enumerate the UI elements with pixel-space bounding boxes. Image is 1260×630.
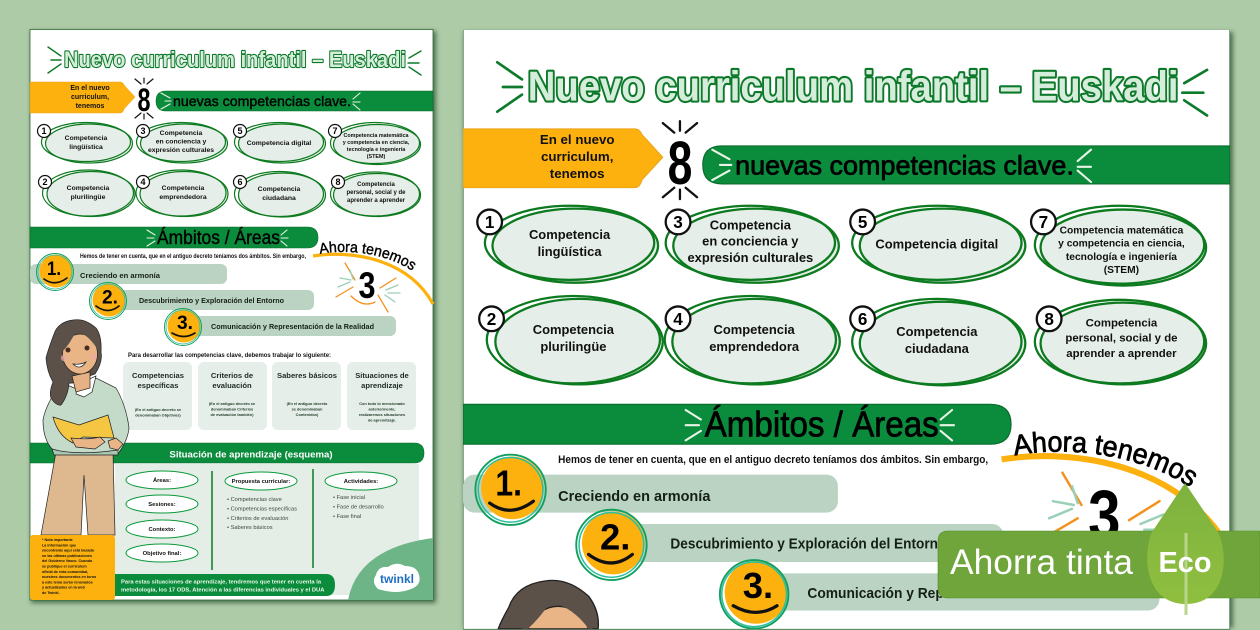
competencia 7 enlarged: 7 xyxy=(1039,213,1048,232)
nota importante: * Nota importante xyxy=(42,538,73,542)
metodologia pill: Para estas situaciones de aprendizaje, tendremos que tener en cuenta la xyxy=(121,580,322,586)
card: criterios de evaluacion: evaluación xyxy=(212,381,252,390)
competencia 5 enlarged: 5 xyxy=(858,213,868,232)
woman illustration xyxy=(41,320,129,535)
competencia 8: 8 xyxy=(335,177,341,187)
card: competencias especificas: Competencias xyxy=(132,371,184,380)
card: competencias especificas: (En el antiguo decreto se xyxy=(135,407,182,412)
card: situaciones de aprendizaje: aprendizaje xyxy=(361,381,403,390)
competencia 5: 5 xyxy=(237,126,243,136)
ambito 2 enlarged xyxy=(576,510,1003,580)
number 8 enlarged: 8 xyxy=(668,129,692,197)
nota importante: encontrarás aquí está basada xyxy=(42,549,95,553)
icon: eco leaf xyxy=(1147,483,1224,615)
orange intro tab enlarged: curriculum, xyxy=(541,149,613,164)
competencia 7 enlarged: Competencia matemática xyxy=(1060,225,1184,236)
intro sentence: Hemos de tener en cuenta, que en el antiguo decreto teníamos dos ámbitos. Sin embargo, xyxy=(80,254,306,260)
competencia 7: 7 xyxy=(332,126,338,136)
competencia 3: Competencia xyxy=(160,130,203,137)
card: criterios de evaluacion: Criterios de xyxy=(211,371,253,380)
competencia 1 enlarged: Competencia xyxy=(529,227,611,242)
actividades xyxy=(325,472,397,520)
competencia 1 enlarged: lingüística xyxy=(538,244,602,259)
competencia 5 enlarged: Competencia digital xyxy=(875,237,998,251)
card: saberes basicos: Saberes básicos xyxy=(277,371,337,380)
card: criterios de evaluacion xyxy=(198,362,267,430)
competencia 6 enlarged: ciudadana xyxy=(905,341,970,356)
competencia 5: Competencia digital xyxy=(247,140,311,147)
competencia 6: ciudadana xyxy=(262,195,296,202)
number 8 xyxy=(135,78,153,119)
competencia 8: Competencia xyxy=(357,182,395,188)
competencia 7: tecnología e ingeniería xyxy=(347,147,406,153)
card: saberes basicos xyxy=(272,362,341,430)
situacion de aprendizaje heading: Situación de aprendizaje (esquema) xyxy=(169,450,333,460)
number 8: 8 xyxy=(138,82,150,118)
icon: eco leaf: Eco xyxy=(1158,547,1212,579)
schema dividers xyxy=(212,469,313,570)
competencia 7 enlarged xyxy=(1031,206,1206,286)
competencia 2: Competencia xyxy=(67,185,110,192)
twinkl corner logo: twinkl xyxy=(380,572,414,586)
competencia 8 enlarged: personal, social y de xyxy=(1065,333,1178,345)
intro to cards: Para desarrollar las competencias clave, debemos trabajar lo siguiente: xyxy=(128,352,331,359)
card: competencias especificas: específicas xyxy=(138,381,178,390)
ambito 2 enlarged: Descubrimiento y Exploración del Entorno xyxy=(670,537,947,553)
ambitos heading bar enlarged: Ámbitos / Áreas xyxy=(705,404,939,445)
competencia 1: 1 xyxy=(41,126,47,136)
actividades: • Fase inicial xyxy=(333,495,365,501)
competencia 6 xyxy=(234,172,326,217)
competencia 3 enlarged: 3 xyxy=(673,213,683,232)
competencia 3: en conciencia y xyxy=(156,138,207,146)
ambito 2: Descubrimiento y Exploración del Entorno xyxy=(139,296,284,305)
card: criterios de evaluacion: (En el antiguo decreto se xyxy=(209,401,256,406)
ambitos heading bar enlarged xyxy=(463,404,1011,445)
competencia 3: expresión culturales xyxy=(148,147,214,154)
competencia 4: Competencia xyxy=(162,185,205,192)
propuesta curricular: Propuesta curricular: xyxy=(232,479,290,485)
competencia 3 enlarged: Competencia xyxy=(710,218,792,232)
card: saberes basicos: (En el antiguo decreto xyxy=(287,401,328,406)
competencia 7: y competencia en ciencia, xyxy=(343,140,410,146)
competencia 6: 6 xyxy=(237,177,243,187)
propuesta curricular: • Competencias específicas xyxy=(227,506,297,512)
competencia 1 enlarged: 1 xyxy=(485,213,495,232)
competencia 1: lingüística xyxy=(69,144,103,151)
competencia 6 enlarged: 6 xyxy=(858,310,867,329)
card: criterios de evaluacion: denominaban Criterios xyxy=(211,406,253,412)
actividades: • Fase final xyxy=(333,514,361,520)
competencia 8 enlarged xyxy=(1035,300,1206,384)
competencias heading bar xyxy=(156,91,433,111)
schema ovals left: Sesiones: xyxy=(148,502,176,508)
card: saberes basicos: se denominaban xyxy=(292,406,323,412)
competencia 4 enlarged: emprendedora xyxy=(709,339,800,354)
competencia 2 enlarged: plurilingüe xyxy=(540,339,606,354)
ambito 2 enlarged: 2. xyxy=(600,517,630,558)
competencia 2: 2 xyxy=(42,177,48,187)
nota importante: nuestros documentos en torno xyxy=(42,575,97,579)
ambito 3 enlarged xyxy=(720,560,1159,628)
competencia 2 xyxy=(38,170,135,216)
competencia 6 enlarged: Competencia xyxy=(896,324,978,339)
ambito 3 enlarged: Comunicación y Representación de la Realidad xyxy=(807,586,1118,602)
ambito 1 enlarged: Creciendo en armonía xyxy=(558,489,711,505)
callout: ahora tenemos 3 enlarged: 3 xyxy=(1088,475,1120,554)
ambitos heading bar xyxy=(30,227,318,249)
ambito 1 enlarged: 1. xyxy=(495,463,522,503)
callout: ahora tenemos 3 xyxy=(312,241,434,313)
competencia 5 enlarged xyxy=(850,206,1025,283)
competencia 7 enlarged: (STEM) xyxy=(1104,265,1139,276)
nota importante: y actualizados en la web xyxy=(42,586,86,590)
twinkl corner logo xyxy=(348,538,433,600)
nota importante: a este tema serán renovados xyxy=(42,580,93,584)
schema ovals left: Áreas: xyxy=(153,477,171,484)
propuesta curricular: • Competencias clave xyxy=(227,497,282,503)
competencias heading bar enlarged: nuevas competencias clave. xyxy=(735,150,1074,180)
callout: ahora tenemos 3: 3 xyxy=(358,265,376,306)
schema ovals left: Contexto: xyxy=(148,527,176,533)
card: situaciones de aprendizaje: Con todo lo mencionado xyxy=(359,401,405,406)
competencia 7: (STEM) xyxy=(367,154,385,160)
competencia 4: emprendedora xyxy=(159,194,207,201)
callout: ahora tenemos 3 enlarged xyxy=(1001,432,1221,531)
competencia 2 enlarged: Competencia xyxy=(533,322,615,337)
poster thumbnail xyxy=(28,28,440,606)
orange intro tab enlarged: tenemos xyxy=(550,166,605,181)
ambito 2: 2. xyxy=(102,288,118,308)
nota importante: de Twinkl. xyxy=(42,591,60,595)
actividades: • Fase de desarrollo xyxy=(333,504,384,510)
actividades: Actividades: xyxy=(344,479,378,485)
competencia 7 enlarged: tecnología e ingeniería xyxy=(1066,252,1177,263)
competencia 4 enlarged xyxy=(665,296,840,384)
ambito 1 xyxy=(30,254,227,290)
orange intro tab enlarged xyxy=(463,129,663,188)
callout: ahora tenemos 3: Ahora tenemos xyxy=(320,241,416,270)
nota importante xyxy=(30,535,115,600)
ambito 3 xyxy=(164,308,396,346)
poster enlarged xyxy=(460,28,1236,630)
card: competencias especificas: denominaban Objetivos) xyxy=(135,412,181,418)
competencia 7 xyxy=(328,122,420,164)
competencias heading bar: nuevas competencias clave. xyxy=(173,93,351,109)
ambito 1: Creciendo en armonía xyxy=(80,271,161,280)
orange intro tab xyxy=(30,82,135,113)
competencia 3 enlarged: expresión culturales xyxy=(687,250,813,265)
ambitos heading bar: Ámbitos / Áreas xyxy=(157,228,280,249)
propuesta curricular: • Criterios de evaluación xyxy=(227,516,288,522)
metodologia pill xyxy=(115,574,335,596)
ambito 2 xyxy=(90,282,314,320)
competencia 3 enlarged xyxy=(666,206,839,283)
propuesta curricular xyxy=(225,472,297,531)
intro sentence enlarged: Hemos de tener en cuenta, que en el antiguo decreto teníamos dos ámbitos. Sin embargo, xyxy=(558,454,988,466)
competencia 3 enlarged: en conciencia y xyxy=(702,234,799,249)
card: situaciones de aprendizaje: Situaciones de xyxy=(355,371,409,380)
competencia 4 enlarged: Competencia xyxy=(714,322,796,337)
nota importante: se publique el currículum xyxy=(42,564,87,568)
number 8 enlarged xyxy=(663,121,697,199)
competencia 6 enlarged xyxy=(850,299,1025,385)
woman head enlarged xyxy=(498,580,598,629)
nota importante: del Gobierno Vasco. Cuando xyxy=(42,559,93,563)
schema panel xyxy=(115,464,419,595)
card: situaciones de aprendizaje: anteriormente, xyxy=(368,406,396,412)
eco ink badge xyxy=(938,483,1260,615)
competencia 5 xyxy=(234,122,326,163)
card: competencias especificas xyxy=(123,362,192,430)
competencia 6: Competencia xyxy=(258,186,301,193)
ambito 3: Comunicación y Representación de la Realidad xyxy=(211,322,374,331)
ambito 3: 3. xyxy=(177,313,193,334)
competencia 4 enlarged: 4 xyxy=(673,310,683,329)
card: criterios de evaluacion: de evaluación también) xyxy=(210,412,254,417)
competencia 8 enlarged: aprender a aprender xyxy=(1066,348,1177,360)
competencia 8: personal, social y de xyxy=(346,190,406,196)
propuesta curricular: • Saberes básicos xyxy=(227,525,273,531)
orange intro tab enlarged: En el nuevo xyxy=(540,132,615,147)
competencia 2: plurilingüe xyxy=(71,194,106,201)
nota importante: La información que xyxy=(42,543,76,547)
competencia 2 enlarged xyxy=(479,296,663,384)
ambito 1: 1. xyxy=(47,259,61,280)
orange intro tab: En el nuevo xyxy=(70,85,110,92)
title: Nuevo curriculum infantil – Euskadi xyxy=(64,47,406,72)
competencia 7 enlarged: y competencia en ciencia, xyxy=(1058,239,1185,250)
metodologia pill: metodología, los 17 ODS, Atención a las diferencias individuales y el DUA xyxy=(121,588,325,594)
title enlarged: Nuevo curriculum infantil – Euskadi xyxy=(528,62,1179,109)
nota importante: en las últimas publicaciones xyxy=(42,554,92,558)
competencia 4 xyxy=(136,170,228,216)
schema ovals left xyxy=(126,471,198,562)
schema ovals left: Objetivo final: xyxy=(143,551,181,557)
competencia 3 xyxy=(136,122,228,163)
competencia 8 enlarged: Competencia xyxy=(1086,317,1158,329)
card: situaciones de aprendizaje: realizaremos situaciones xyxy=(359,412,405,417)
card: situaciones de aprendizaje: de aprendizaje. xyxy=(368,418,396,422)
competencia 1 xyxy=(38,122,132,163)
competencia 2 enlarged: 2 xyxy=(487,310,496,329)
competencia 8 enlarged: 8 xyxy=(1044,310,1054,329)
competencia 3: 3 xyxy=(140,126,146,136)
competencia 1: Competencia xyxy=(65,135,108,142)
competencia 1 enlarged xyxy=(477,206,658,283)
competencia 8: aprender a aprender xyxy=(347,198,406,204)
callout: ahora tenemos 3 enlarged: Ahora tenemos xyxy=(1014,432,1196,486)
card: situaciones de aprendizaje xyxy=(347,362,416,430)
orange intro tab: tenemos xyxy=(76,103,104,110)
eco ink badge: Ahorra tinta xyxy=(950,543,1134,582)
competencia 7: Competencia matemática xyxy=(343,133,410,139)
competencia 4: 4 xyxy=(140,177,146,187)
situacion de aprendizaje heading xyxy=(30,443,424,463)
nota importante: oficial de esta comunidad, xyxy=(42,570,88,574)
ambito 3 enlarged: 3. xyxy=(743,565,773,606)
card: saberes basicos: Contenidos) xyxy=(296,412,319,417)
competencias heading bar enlarged xyxy=(703,146,1230,184)
orange intro tab: curriculum, xyxy=(71,94,109,101)
ambito 1 enlarged xyxy=(463,455,838,525)
competencia 8 xyxy=(330,172,420,216)
